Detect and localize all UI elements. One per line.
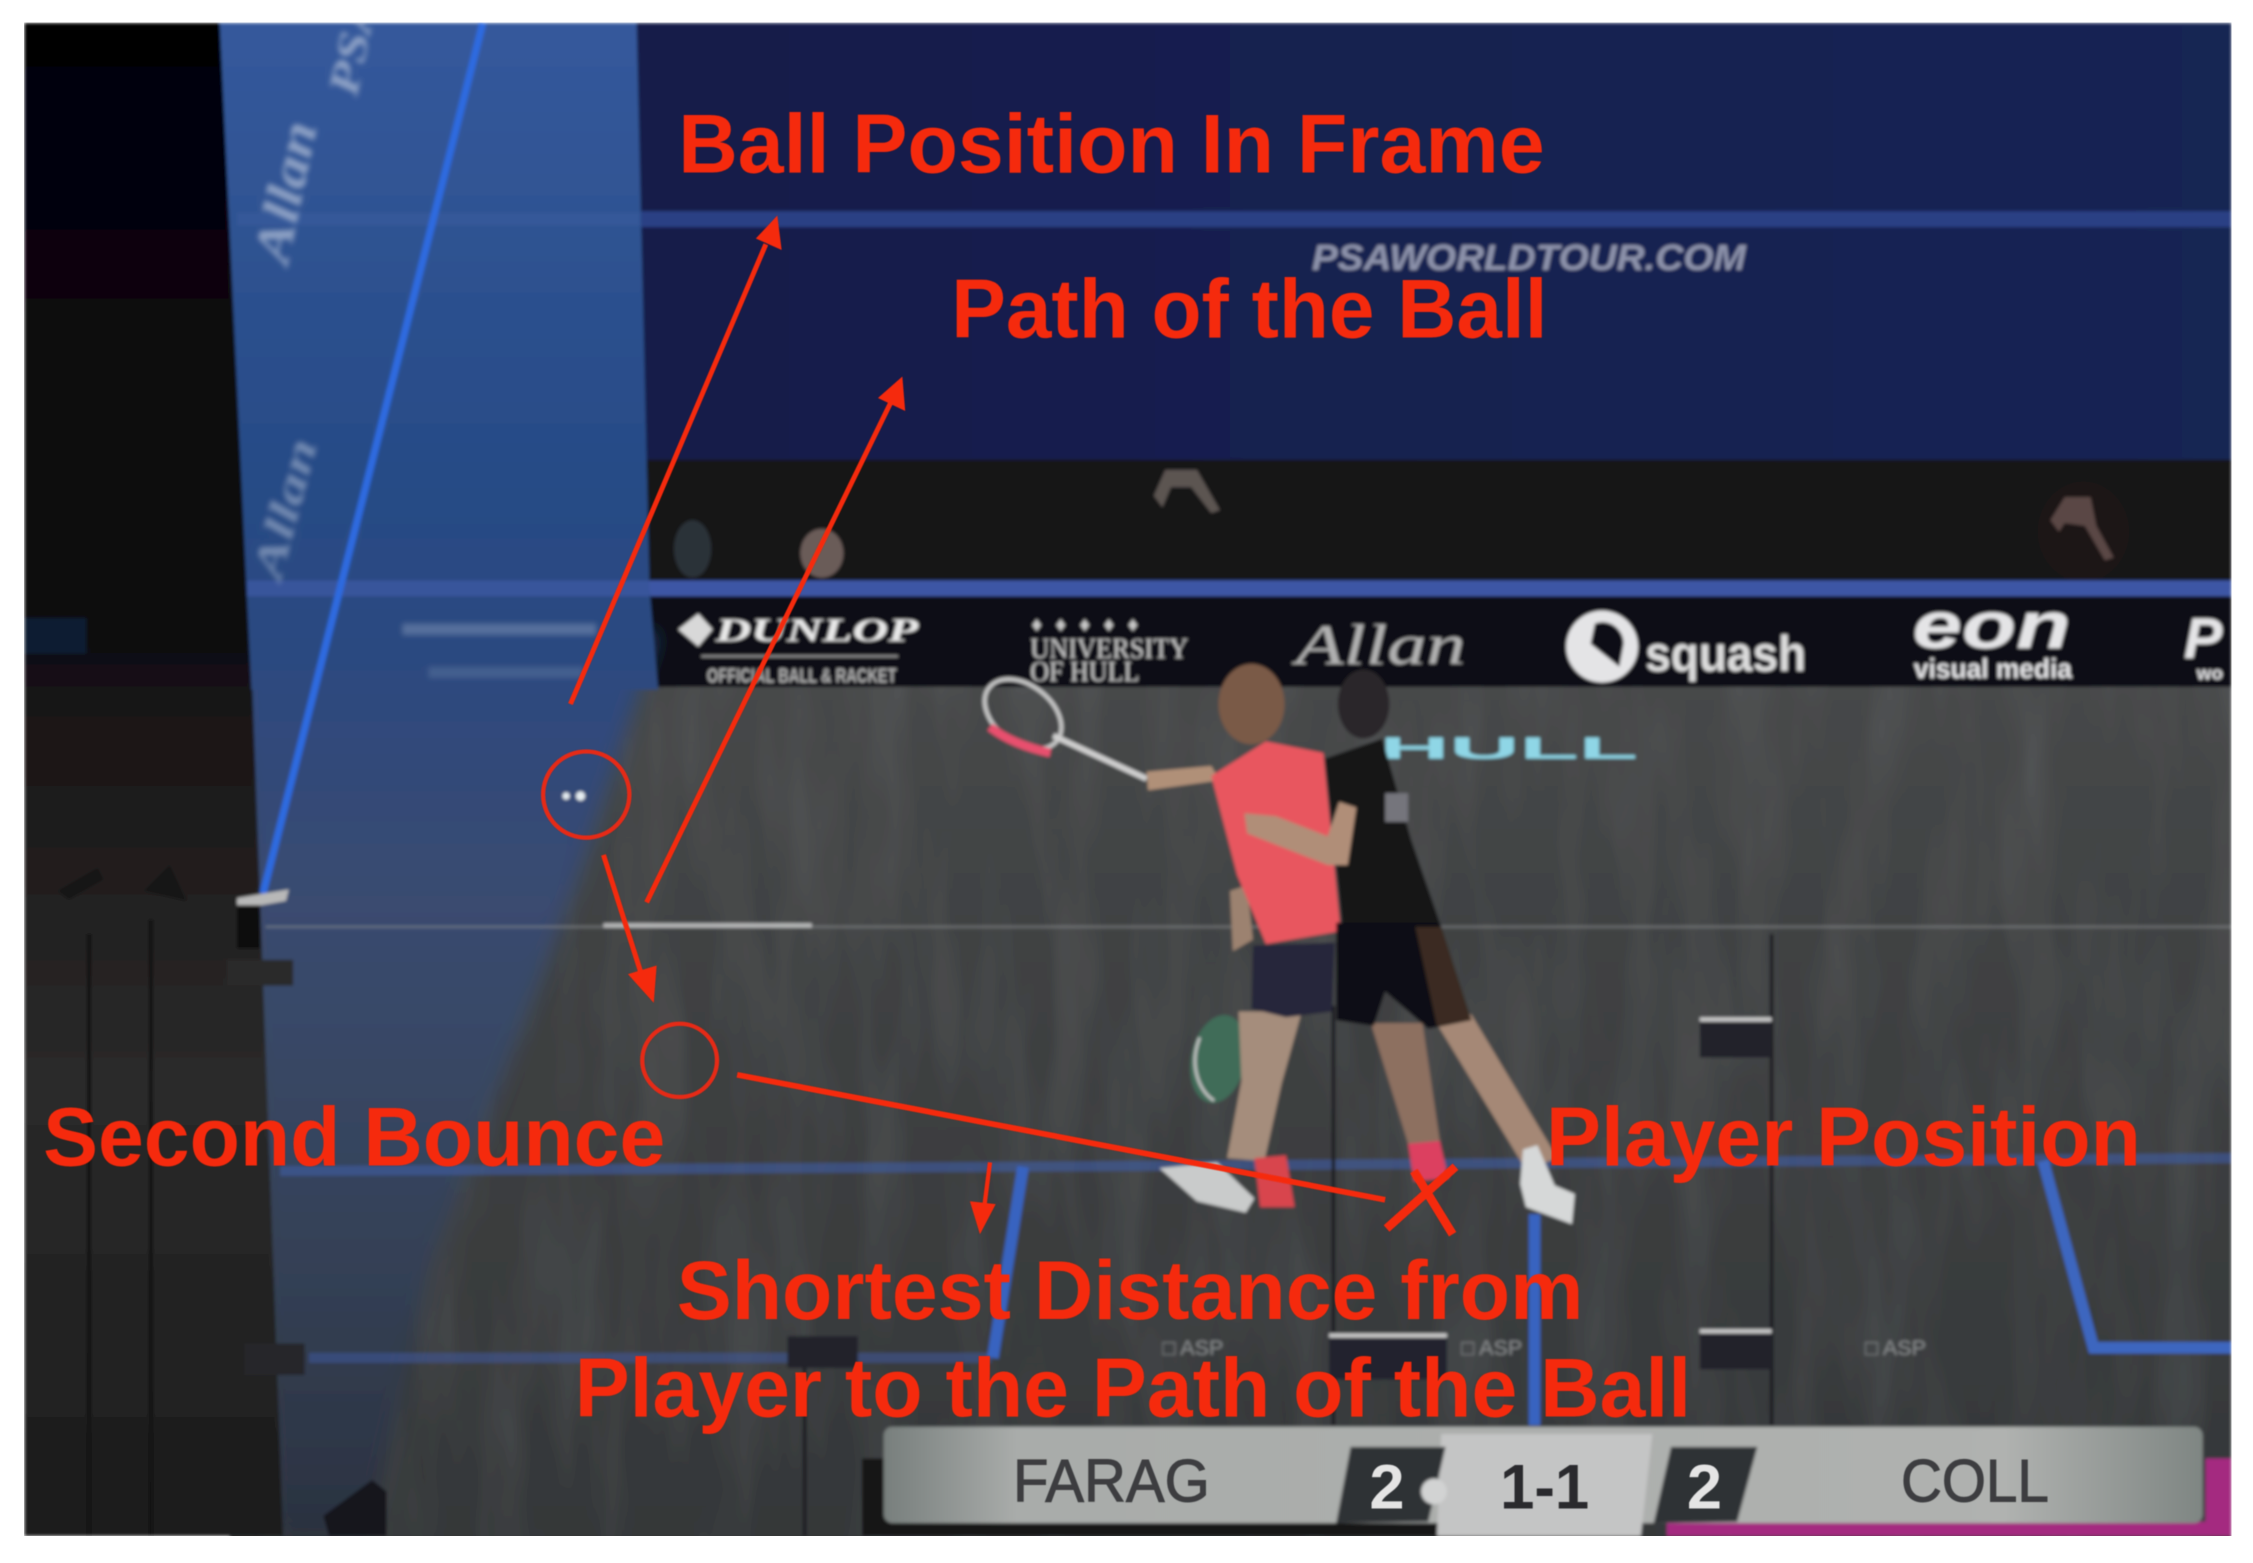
wall text: PSAWORLDTOUR.COM: PSAWORLDTOUR.COM: [1312, 237, 1747, 278]
University of Hull sponsor: OF HULL: [1030, 656, 1139, 688]
Eon Visual Media sponsor: eon: [1912, 589, 2071, 663]
Farag shorts: [1252, 943, 1335, 1017]
University of Hull sponsor: ♦♦♦♦♦: [1032, 614, 1138, 636]
marker: player position X: [1387, 1167, 1456, 1234]
Farag racket: [971, 665, 1147, 779]
England Squash sponsor: [1566, 611, 1806, 683]
scoreboard bar: [884, 1427, 2203, 1523]
glass brackets and vertical joints: [57, 865, 1772, 1536]
reflected sponsor logos on glass: [243, 0, 596, 678]
label: Shortest Distance from Player to the Path of the Ball: [575, 1244, 1691, 1435]
Dunlop sponsor: DUNLOP: [714, 613, 919, 649]
court floor lines: [280, 1158, 2231, 1425]
England Squash sponsor: squash: [1645, 625, 1806, 682]
Coll head: [1338, 670, 1389, 739]
arrow: to path of ball: [647, 376, 905, 902]
Farag green racket: [1182, 1010, 1254, 1108]
arrow: to second bounce: [603, 855, 657, 1003]
serve indicator: [1421, 1479, 1447, 1504]
reflected sponsor logos on glass: Allan: [243, 116, 329, 272]
player: Farag: [971, 664, 1341, 1213]
floor ASP marks: [1162, 1335, 1926, 1360]
arrow: to ball position: [570, 216, 782, 704]
scoreboard text: 2: [1687, 1453, 1722, 1523]
faint line across glass: [237, 213, 639, 226]
University of Hull sponsor: UNIVERSITY: [1030, 633, 1189, 665]
reflected sponsor logos on glass: Allan: [243, 434, 327, 589]
Coll shoes: [1408, 1141, 1448, 1181]
glass corner blue line: [263, 23, 483, 894]
ball in frame: [563, 791, 585, 801]
scoreboard text: COLL: [1901, 1447, 2049, 1515]
Farag shirt: [1211, 741, 1341, 944]
reflected sponsor logos on glass: PSA: [320, 0, 387, 101]
Farag arm: [1147, 766, 1220, 790]
Coll arm: [1244, 802, 1356, 865]
label: Ball Position In Frame: Ball Position In Frame: [678, 97, 1545, 190]
magenta broadcast edge: [1667, 1458, 2231, 1536]
floor ASP marks: □ ASP: [1865, 1335, 1926, 1360]
Coll shirt: [1325, 739, 1440, 922]
sponsor banner: [639, 589, 2231, 690]
line: bounce to player: [737, 1075, 1385, 1200]
glass joint line: [266, 926, 2231, 928]
tin line: [639, 580, 2231, 596]
floor text: HULL: HULL: [1379, 733, 1638, 766]
scoreboard shadow: [862, 1458, 891, 1536]
side glass wall: [220, 23, 658, 690]
far left dark column: [24, 23, 283, 1536]
audience band: [632, 460, 2231, 589]
Farag games box: [1336, 1447, 1445, 1523]
floor ASP marks: □ ASP: [1461, 1335, 1522, 1360]
Coll shorts: [1336, 922, 1471, 1029]
label: Path of the Ball: Path of the Ball: [951, 263, 1547, 356]
scoreboard text: FARAG: [1013, 1447, 1210, 1515]
Allan sponsor: Allan: [1291, 614, 1466, 677]
scoreboard text: 2: [1369, 1453, 1404, 1523]
Dunlop sponsor: OFFICIAL BALL & RACKET: [707, 666, 897, 688]
cropped sponsor at right: wo: [2196, 663, 2223, 684]
cropped sponsor at right: P: [2184, 607, 2223, 671]
circle: second bounce: [642, 1024, 717, 1097]
label: Second Bounce: Second Bounce: [43, 1090, 665, 1183]
label: Player Position: Player Position: [1546, 1090, 2141, 1183]
scoreboard text: 1-1: [1500, 1453, 1589, 1523]
Coll games box: [1654, 1447, 1757, 1523]
label: Shortest Distance from Player to the Path of the Ball: Player to the Path of the Ball: [575, 1342, 1691, 1435]
court floor: [230, 687, 2231, 1549]
University of Hull sponsor: [1030, 614, 1189, 688]
scoreboard: [862, 1427, 2231, 1536]
Farag back leg and shoes: [1227, 1012, 1302, 1161]
annotations: [43, 97, 2141, 1435]
Eon Visual Media sponsor: [1910, 608, 2076, 682]
back wall: [632, 23, 2231, 463]
floor ASP marks: □ ASP: [1162, 1335, 1223, 1360]
glass over floor, soft edge: [237, 632, 658, 1536]
label: Shortest Distance from Player to the Path of the Ball: Shortest Distance from: [677, 1244, 1583, 1337]
top wall line: [632, 211, 2231, 227]
Dunlop sponsor: [678, 613, 919, 688]
circle: ball position: [543, 751, 629, 838]
arrow: small distance arrow: [970, 1162, 996, 1234]
scoreboard text: [1013, 1447, 2049, 1523]
player: Coll: [1244, 670, 1575, 1224]
Coll legs: [1371, 1023, 1443, 1162]
Eon Visual Media sponsor: visual media: [1914, 653, 2073, 684]
Farag head: [1218, 664, 1285, 744]
centre score panel: [1437, 1434, 1652, 1536]
